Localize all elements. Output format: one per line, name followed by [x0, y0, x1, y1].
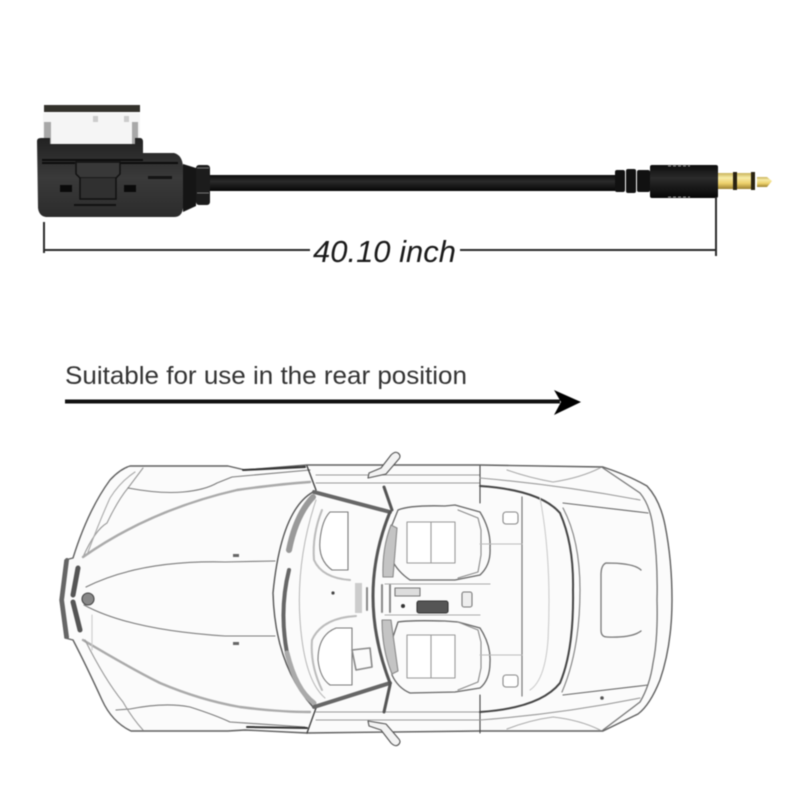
rear deck [480, 486, 580, 712]
side panel upper [383, 525, 397, 577]
connector strain relief [183, 164, 210, 212]
hood vent lower [233, 642, 239, 645]
hood lines [83, 468, 310, 730]
trunk and rear bumper [563, 468, 657, 730]
hood vent upper [233, 554, 239, 557]
side mirror lower [368, 685, 400, 746]
dimension label: 40.10 inch [313, 234, 456, 269]
cable product photo [37, 105, 772, 217]
front grille and badge [62, 560, 94, 637]
gold jack plug [718, 172, 772, 190]
footwells [312, 510, 356, 690]
door lines and sills [243, 466, 640, 733]
direction arrow [65, 390, 581, 415]
connector housing [37, 138, 183, 217]
side mirror upper [368, 452, 400, 510]
dimension line [44, 197, 716, 256]
windshield frame [273, 492, 390, 707]
jack strain relief [615, 169, 650, 193]
connector metal tip [43, 105, 140, 145]
front seat upper [392, 505, 490, 580]
car body outline [60, 465, 672, 733]
cable wire [186, 175, 616, 191]
front seat lower [392, 621, 490, 693]
side panel lower [382, 620, 398, 674]
jack housing [650, 165, 718, 198]
car top view [60, 452, 672, 746]
rear position caption: Suitable for use in the rear position [65, 362, 467, 390]
center console [352, 583, 490, 670]
